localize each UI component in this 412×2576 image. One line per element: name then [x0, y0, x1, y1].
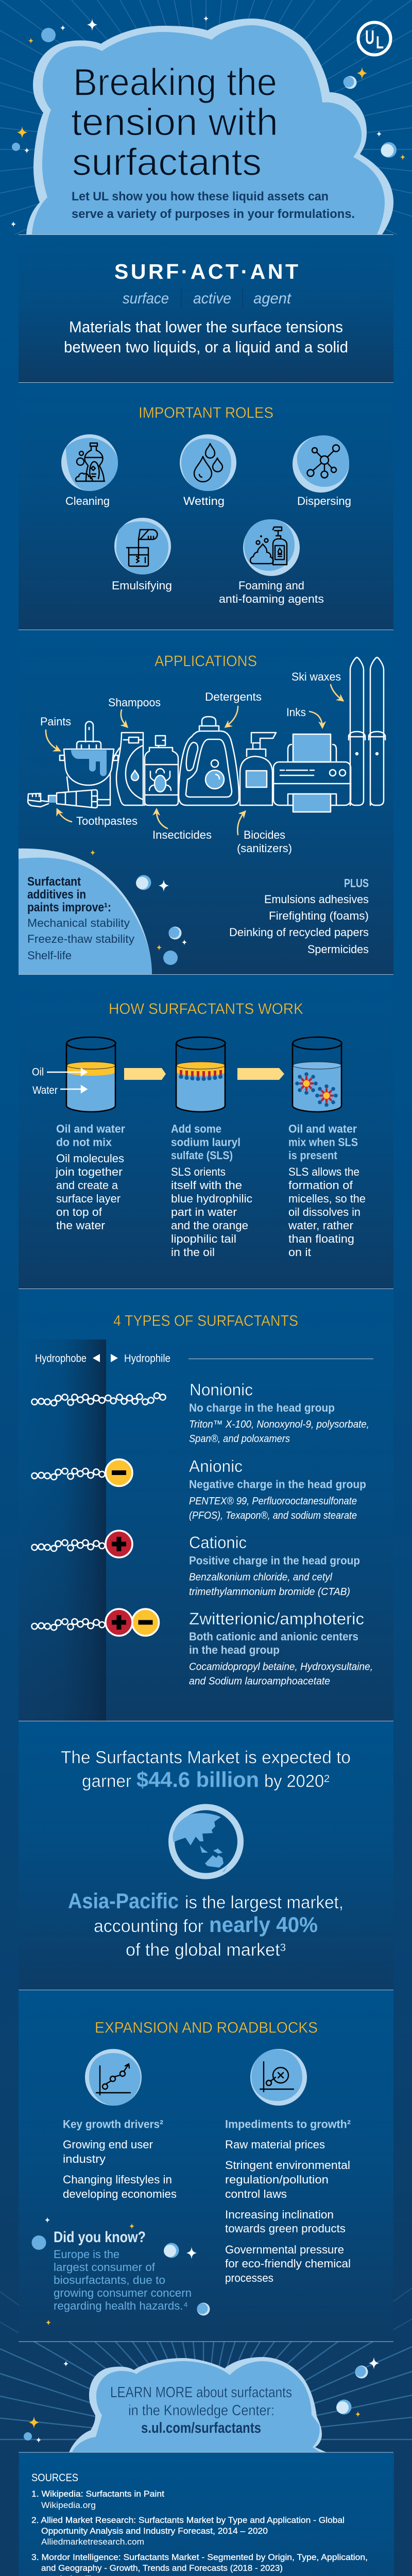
- text: anionic: Anionic: [189, 1457, 243, 1476]
- callout: did you know: growing consumer concern: [54, 2286, 192, 2299]
- text: cationic: [189, 1533, 360, 1598]
- title: [71, 61, 278, 183]
- callout: paint additives: Freeze-thaw stability: [27, 933, 134, 945]
- source 1: [31, 2489, 164, 2510]
- application labels: Toothpastes: [76, 815, 138, 827]
- text: zwitterionic: in the head group: [189, 1643, 280, 1656]
- additional applications list: Emulsions adhesives: [264, 893, 369, 906]
- step 2 text: sodium lauryl: [171, 1136, 241, 1149]
- application product illustration: [28, 657, 385, 812]
- callout: did you know: Europe is the: [54, 2248, 119, 2261]
- icon: UL logo: [358, 23, 390, 55]
- application labels: Inks: [286, 706, 306, 719]
- application labels: Ski waxes: [291, 670, 341, 683]
- header sparkles and bubbles: [11, 15, 405, 227]
- icon: skis: [349, 657, 385, 805]
- heading: expansion and roadblocks: EXPANSION AND ROADBLOCKS: [95, 2020, 318, 2037]
- title: surfactants: [72, 141, 262, 183]
- Asia-Pacific text: of the global market³: [126, 1940, 286, 1960]
- market size text: $44.6 billion: [136, 1767, 259, 1792]
- panel: 4 types of surfactants: [19, 1289, 393, 1721]
- additional applications list: Deinking of recycled papers: [229, 926, 369, 939]
- text: nonionic: Triton™ X-100, Nonoxynol-9, polysorbate,: [189, 1419, 369, 1430]
- step 3 text: water, rather: [288, 1219, 353, 1232]
- text: impediments to growth: processes: [225, 2272, 273, 2284]
- heading: applications: APPLICATIONS: [154, 653, 257, 670]
- step 2 text: part in water: [171, 1206, 237, 1218]
- text: anionic: Negative charge in the head group: [189, 1478, 366, 1491]
- source 2: Opportunity Analysis and Industry Forecast, 2014 – 2020: [41, 2526, 268, 2536]
- title: Breaking the: [73, 61, 277, 104]
- beaker 3: micelles: [293, 1037, 342, 1112]
- step 2 text: SLS orients: [171, 1165, 226, 1178]
- panel: important roles: [19, 382, 393, 630]
- step 2 text: sulfate (SLS): [171, 1149, 233, 1162]
- panel: applications: [19, 630, 393, 974]
- learn more text: [110, 2384, 292, 2436]
- step 1 text: do not mix: [56, 1136, 112, 1149]
- application labels: Detergents: [205, 690, 262, 703]
- rays in outer margins: [0, 2288, 412, 2333]
- heading: sources: SOURCES: [31, 2472, 78, 2484]
- additional applications list: PLUS: [344, 876, 369, 890]
- icon: printer: [273, 734, 351, 812]
- panel: expansion and roadblocks: [19, 1990, 393, 2342]
- step 1 text: Oil molecules: [56, 1152, 124, 1165]
- callout: paint additives: additives in: [27, 888, 86, 902]
- molecule: nonionic chain: [31, 1393, 166, 1406]
- role: wetting: [180, 434, 236, 507]
- role: cleaning: Cleaning: [65, 495, 110, 507]
- step 1 text: on top of: [56, 1206, 102, 1218]
- definition text: Materials that lower the surface tensions: [69, 318, 343, 336]
- role: foaming: Foaming and: [238, 579, 304, 592]
- surf-act-ant heading: SURF·ACT·ANT: [114, 260, 298, 283]
- step 1 text: join together: [55, 1165, 123, 1178]
- molecule: cationic: [31, 1531, 132, 1557]
- text: key growth drivers: Growing end user: [63, 2138, 153, 2151]
- step 1 text: surface layer: [56, 1192, 121, 1205]
- source 2: Alliedmarketresearch.com: [41, 2537, 144, 2547]
- step 1 text: and create a: [56, 1179, 118, 1192]
- step 1 text: the water: [56, 1219, 105, 1232]
- callout: paint additives: Surfactant: [27, 875, 81, 889]
- text: cationic: trimethylammonium bromide (CTAB): [189, 1586, 350, 1598]
- additional applications list: [229, 876, 369, 956]
- learn more text: LEARN MORE about surfactants: [110, 2384, 292, 2401]
- surface active agent: surface: [123, 290, 169, 307]
- icon: impeded chart: [250, 2049, 307, 2106]
- title: tension with: [71, 101, 278, 143]
- icon: pump bottle: [240, 733, 276, 805]
- Asia-Pacific text: [68, 1889, 344, 1960]
- step 3 text: oil dissolves in: [288, 1206, 360, 1218]
- subtitle: [72, 190, 355, 221]
- panel: surfactant definition: [19, 234, 393, 382]
- step 2 text: and the orange: [171, 1219, 248, 1232]
- step 2 text: lipophilic tail: [171, 1232, 236, 1245]
- role: emulsifying: [112, 518, 172, 592]
- header cloud: [26, 19, 393, 234]
- text: impediments to growth: Governmental pressure: [225, 2243, 344, 2256]
- application labels: (sanitizers): [237, 842, 292, 855]
- learn more text: s.ul.com/surfactants: [141, 2420, 261, 2436]
- text: zwitterionic: Both cationic and anionic centers: [189, 1630, 358, 1643]
- text: nonionic: No charge in the head group: [189, 1401, 335, 1414]
- callout: did you know: Did you know?: [54, 2229, 146, 2246]
- text: anionic: PENTEX® 99, Perfluorooctanesulfonate: [189, 1496, 357, 1507]
- surface active agent: [123, 289, 292, 309]
- section divider lines: [19, 234, 393, 2453]
- Asia-Pacific text: Asia-Pacific: [68, 1889, 179, 1913]
- text: zwitterionic: Zwitterionic/amphoteric: [189, 1609, 364, 1628]
- oil and water labels with arrows: Oil: [32, 1066, 44, 1078]
- icon: UL logo: U: [365, 27, 374, 48]
- step 3 text: [288, 1122, 366, 1259]
- application labels: Biocides: [244, 828, 285, 841]
- molecule: anionic: [31, 1459, 132, 1486]
- heading: important roles: IMPORTANT ROLES: [139, 404, 273, 421]
- step 3 text: is present: [288, 1149, 338, 1162]
- beaker 2: with SLS: [176, 1037, 226, 1112]
- text: cationic: Cationic: [189, 1533, 247, 1552]
- callout: did you know: biosurfactants, due to: [54, 2274, 165, 2286]
- text: impediments to growth: control laws: [225, 2188, 287, 2200]
- step 3 text: mix when SLS: [288, 1136, 358, 1149]
- text: key growth drivers: developing economies: [63, 2188, 177, 2200]
- application labels: Insecticides: [152, 828, 212, 841]
- text: nonionic: Span®, and poloxamers: [189, 1433, 290, 1445]
- surface active agent: agent: [253, 290, 292, 307]
- learn more text: in the Knowledge Center:: [128, 2402, 274, 2419]
- step 1 text: Oil and water: [56, 1122, 125, 1136]
- step 3 text: formation of: [288, 1179, 353, 1192]
- icon: insecticide spray: [145, 736, 178, 805]
- oil and water labels with arrows: Water: [32, 1084, 58, 1096]
- text: impediments to growth: towards green products: [225, 2222, 346, 2235]
- source 3: and Geography - Growth, Trends and Forecasts (2018 - 2023): [41, 2563, 283, 2573]
- icon: toothpaste and brush: [28, 790, 97, 808]
- application labels: Shampoos: [108, 696, 161, 709]
- text: key growth drivers: industry: [63, 2153, 106, 2165]
- subtitle: Let UL show you how these liquid assets can: [72, 190, 329, 204]
- Asia-Pacific text: nearly 40%: [209, 1912, 318, 1937]
- text: key growth drivers: Key growth drivers²: [63, 2117, 163, 2131]
- application labels: Paints: [40, 715, 71, 728]
- text: key growth drivers: [63, 2117, 177, 2200]
- callout: did you know: [54, 2229, 192, 2312]
- text: impediments to growth: Impediments to growth²: [225, 2117, 351, 2131]
- text: zwitterionic: [189, 1609, 373, 1687]
- step 2 text: Add some: [171, 1122, 221, 1136]
- text: impediments to growth: [225, 2117, 351, 2284]
- text: impediments to growth: for eco-friendly chemical: [225, 2257, 351, 2270]
- did you know sparkles and bubbles: [32, 2217, 210, 2326]
- text: cationic: Positive charge in the head group: [189, 1554, 360, 1567]
- step 2 text: itself with the: [171, 1179, 242, 1192]
- source 3: 3. Mordor Intelligence: Surfactants Market - Segmented by Origin, Type, Application,: [31, 2552, 368, 2562]
- role: emulsifying: Emulsifying: [112, 579, 172, 592]
- icon: globe: [171, 1807, 241, 1876]
- icon: detergent: [179, 717, 239, 805]
- role: dispersing: [293, 435, 351, 507]
- market size text: [61, 1748, 351, 1792]
- text: zwitterionic: and Sodium lauroamphoacetate: [189, 1675, 330, 1687]
- role: foaming: [219, 519, 324, 605]
- beaker 1: oil and water: [66, 1037, 115, 1112]
- hydrophobe hydrophile legend: [35, 1353, 373, 1364]
- oil and water labels with arrows: [32, 1066, 86, 1096]
- source 1: Wikipedia.org: [41, 2500, 96, 2510]
- callout: paint additives: Shelf-life: [27, 949, 72, 962]
- learn more section: [0, 2288, 412, 2452]
- source 2: 2. Allied Market Research: Surfactants Market by Type and Application - Global: [31, 2515, 345, 2525]
- hydrophobe hydrophile legend: Hydrophile: [124, 1353, 170, 1364]
- cloud: [69, 2357, 327, 2452]
- text: nonionic: Nonionic: [190, 1381, 253, 1399]
- heading: how surfactants work: HOW SURFACTANTS WORK: [109, 1001, 303, 1018]
- role: wetting: Wetting: [183, 495, 225, 507]
- step 2 text: blue hydrophilic: [171, 1192, 252, 1205]
- application arrows: [46, 685, 343, 835]
- text: impediments to growth: regulation/pollution: [225, 2173, 329, 2186]
- surface active agent: active: [193, 290, 231, 307]
- additional applications list: Spermicides: [307, 943, 369, 956]
- market size text: by 2020²: [264, 1771, 330, 1791]
- step 3 text: Oil and water: [288, 1122, 357, 1136]
- role: foaming: anti-foaming agents: [219, 592, 324, 605]
- heading: 4 types: 4 TYPES OF SURFACTANTS: [113, 1313, 298, 1329]
- icon: growth chart: [85, 2049, 142, 2106]
- market size text: garner: [82, 1771, 131, 1791]
- text: zwitterionic: Cocamidopropyl betaine, Hydroxysultaine,: [189, 1661, 373, 1672]
- additional applications list: Firefighting (foams): [269, 909, 369, 922]
- application labels: [40, 670, 341, 855]
- learn more sparkles and bubbles: [24, 2357, 379, 2443]
- text: cationic: Benzalkonium chloride, and cetyl: [189, 1571, 333, 1583]
- panel: how surfactants work: [19, 974, 393, 1289]
- panel: market: [19, 1721, 393, 1990]
- callout: paint additives: [19, 849, 152, 974]
- icon: shampoo: [112, 733, 143, 805]
- step 1 text: [55, 1122, 125, 1232]
- definition text: between two liquids, or a liquid and a solid: [64, 338, 348, 356]
- text: impediments to growth: Raw material prices: [225, 2138, 325, 2151]
- hydrophobe shaded column: [19, 1340, 106, 1721]
- panel: sources: [19, 2452, 394, 2576]
- source 2: [31, 2515, 345, 2547]
- arrow: step 1 to 2: [124, 1068, 166, 1080]
- text: key growth drivers: Changing lifestyles in: [63, 2173, 172, 2186]
- role: dispersing: Dispersing: [297, 495, 351, 507]
- hydrophobe hydrophile legend: Hydrophobe: [35, 1353, 87, 1364]
- source 1: 1. Wikipedia: Surfactants in Paint: [31, 2489, 164, 2499]
- definition text: [64, 318, 348, 356]
- arrow: step 2 to 3: [237, 1068, 284, 1080]
- text: impediments to growth: Stringent environmental: [225, 2159, 350, 2172]
- icon: UL logo: L: [376, 33, 384, 53]
- market size text: The Surfactants Market is expected to: [61, 1748, 351, 1767]
- step 3 text: than floating: [288, 1232, 354, 1245]
- header section: [0, 0, 412, 234]
- text: nonionic: [189, 1381, 369, 1445]
- subtitle: serve a variety of purposes in your formulations.: [72, 207, 355, 221]
- step 3 text: SLS allows the: [288, 1165, 359, 1178]
- applications sparkles and bubbles: [90, 850, 187, 965]
- Asia-Pacific text: accounting for: [94, 1917, 203, 1936]
- text: impediments to growth: Increasing inclination: [225, 2208, 334, 2221]
- step 2 text: [171, 1122, 252, 1259]
- callout: did you know: largest consumer of: [54, 2261, 156, 2274]
- step 3 text: on it: [288, 1246, 311, 1259]
- step 2 text: in the oil: [171, 1246, 215, 1259]
- icon: paint bucket: [60, 721, 118, 805]
- text: anionic: (PFOS), Texapon®, and sodium stearate: [189, 1510, 357, 1521]
- callout: paint additives: paints improve¹:: [27, 901, 111, 914]
- text: anionic: [189, 1457, 366, 1521]
- Asia-Pacific text: is the largest market,: [185, 1893, 344, 1912]
- molecule: zwitterionic: [31, 1609, 159, 1636]
- callout: paint additives: Mechanical stability: [27, 917, 130, 929]
- callout: did you know: regarding health hazards.⁴: [54, 2299, 188, 2312]
- header sun rays: [0, 0, 412, 234]
- source 3: [31, 2552, 368, 2576]
- role: cleaning: [61, 434, 118, 507]
- rays behind the cloud: [0, 2342, 412, 2439]
- step 3 text: micelles, so the: [288, 1192, 366, 1205]
